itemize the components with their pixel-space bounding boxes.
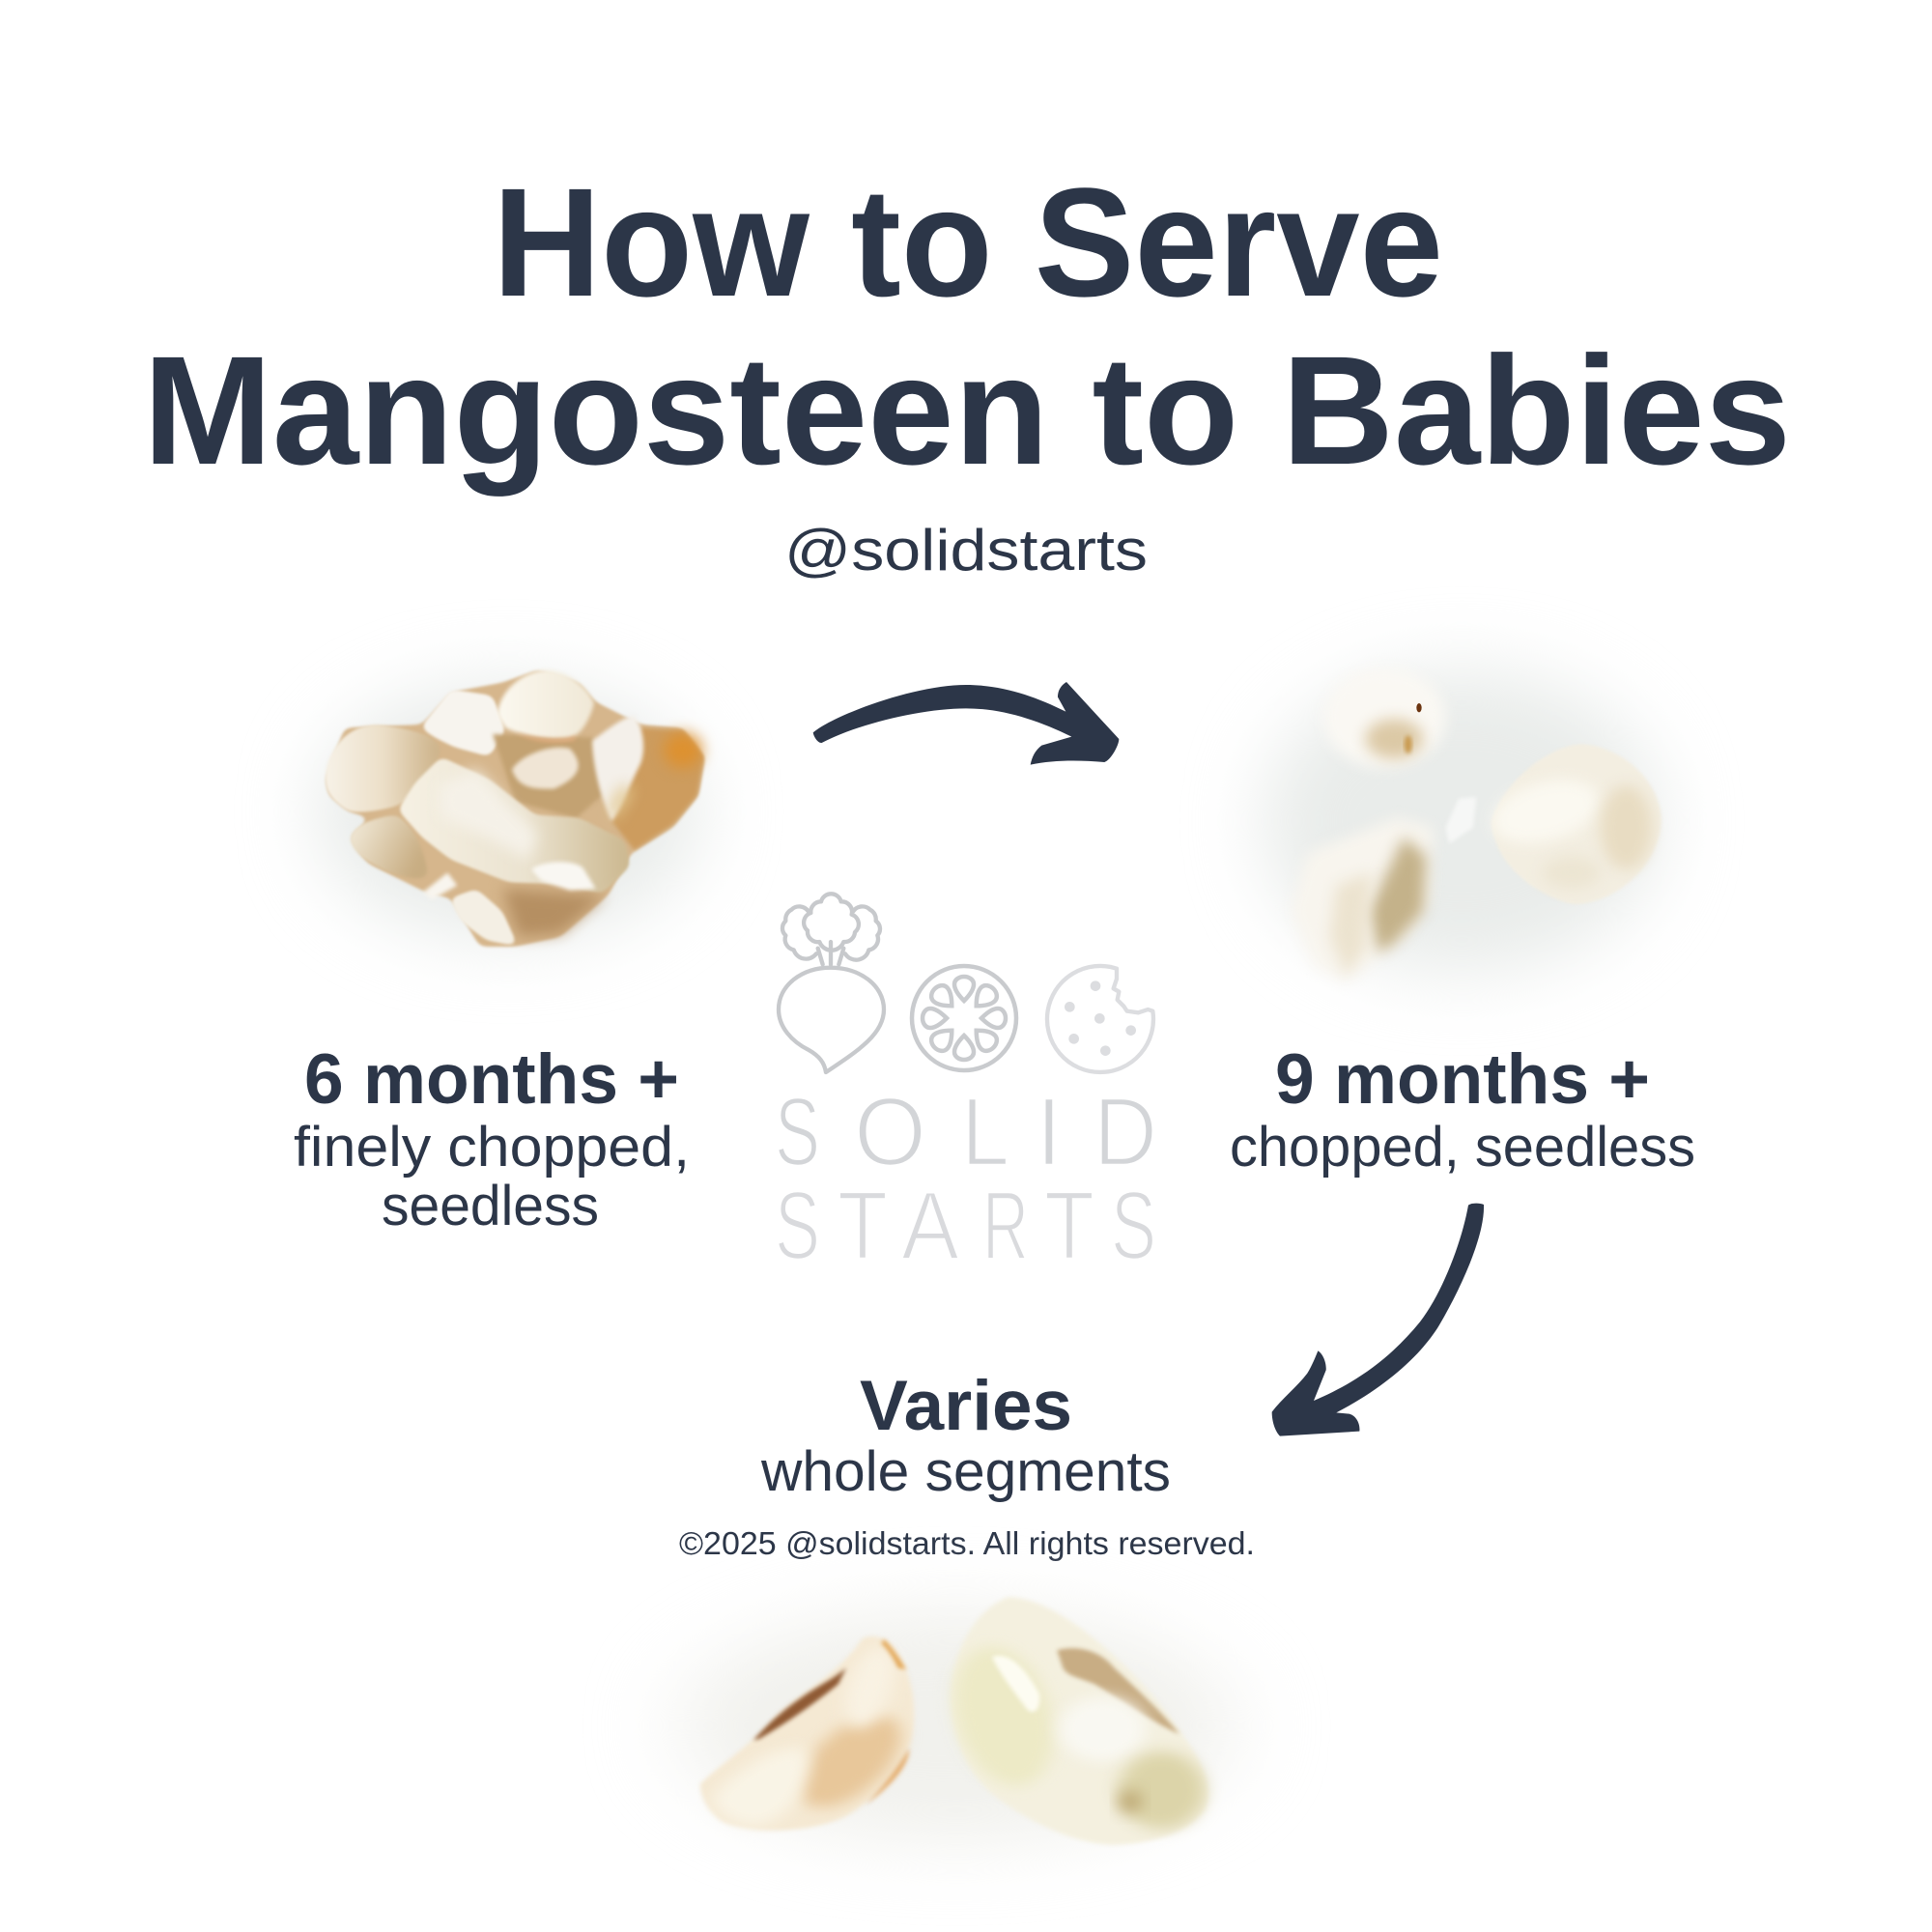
arrow: 6 months to 9 months xyxy=(813,682,1119,765)
icon: cucumber slice xyxy=(912,966,1016,1070)
label: 9 months: 9 months + xyxy=(1275,1040,1650,1119)
label: varies: whole segments xyxy=(760,1440,1171,1503)
title: Mangosteen to Babies xyxy=(143,324,1791,497)
label: 6 months: seedless xyxy=(382,1175,599,1237)
logo wordmark: STARTS: S xyxy=(1111,1172,1156,1280)
label: varies xyxy=(760,1367,1171,1503)
handle: @solidstarts xyxy=(784,518,1148,582)
logo wordmark: STARTS: T xyxy=(1044,1172,1094,1280)
logo wordmark: STARTS: R xyxy=(982,1172,1029,1280)
label: 9 months: chopped, seedless xyxy=(1230,1116,1695,1179)
right segment xyxy=(951,1597,1208,1845)
title: How to Serve xyxy=(493,156,1443,328)
icon: cookie xyxy=(1047,966,1153,1072)
logo watermark xyxy=(775,894,1157,1280)
photo: finely chopped mangosteen xyxy=(316,669,705,947)
label: varies: Varies xyxy=(860,1367,1072,1445)
label: 9 months xyxy=(1230,1040,1695,1179)
logo wordmark: SOLID: S xyxy=(775,1078,820,1186)
title xyxy=(143,156,1791,497)
icon: beet xyxy=(779,894,884,1072)
logo wordmark: STARTS xyxy=(775,1172,1156,1280)
logo wordmark: SOLID xyxy=(775,1078,1157,1186)
logo wordmark: SOLID: L xyxy=(961,1078,1009,1186)
logo wordmark: SOLID: O xyxy=(854,1078,926,1186)
label: 6 months: 6 months + xyxy=(304,1040,679,1119)
logo wordmark: SOLID: I xyxy=(1036,1078,1063,1186)
left segment xyxy=(700,1636,914,1831)
label: 6 months xyxy=(294,1040,690,1237)
logo wordmark: SOLID: D xyxy=(1094,1078,1157,1186)
arrow: 9 months to varies xyxy=(1272,1204,1484,1436)
logo wordmark: STARTS: T xyxy=(838,1172,888,1280)
label: 6 months: finely chopped, xyxy=(294,1116,690,1179)
logo wordmark: STARTS: A xyxy=(901,1172,959,1280)
logo wordmark: STARTS: S xyxy=(775,1172,820,1280)
copyright: ©2025 @solidstarts. All rights reserved. xyxy=(679,1525,1255,1561)
photo: whole segments xyxy=(680,1597,1233,1845)
photo: chopped mangosteen xyxy=(1263,668,1662,982)
